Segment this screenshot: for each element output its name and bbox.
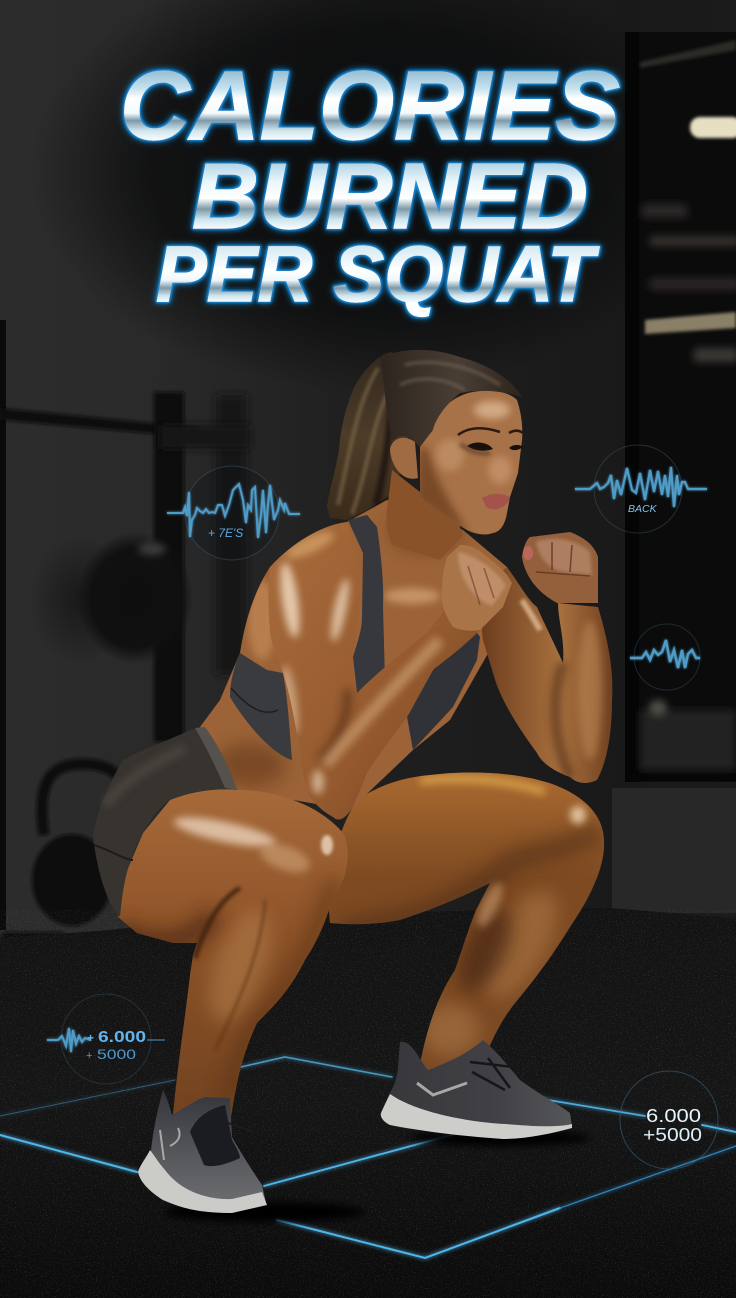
athlete xyxy=(93,350,612,1222)
head xyxy=(380,350,523,560)
neck xyxy=(386,470,463,560)
medicine ball xyxy=(30,532,193,666)
floor platform glowing lines xyxy=(0,1057,736,1258)
shorts xyxy=(93,727,237,917)
eyebrows xyxy=(458,428,523,435)
far shoe xyxy=(381,1040,572,1139)
HUD: waveform upper left xyxy=(167,466,300,560)
far arm xyxy=(482,567,612,783)
HUD: lower left readout xyxy=(47,994,165,1084)
value 6.000: 6.000 xyxy=(98,1029,146,1046)
sports bra straps and cup xyxy=(348,515,480,750)
title xyxy=(120,51,620,318)
near fist xyxy=(442,545,512,631)
floor shadows xyxy=(165,1130,590,1222)
squat rack and barbell xyxy=(0,320,250,930)
title line: calories: CALORIES xyxy=(120,51,620,160)
eyes xyxy=(467,442,523,451)
near shoe xyxy=(138,1090,267,1213)
HUD: lower right readout xyxy=(620,1071,718,1169)
HUD: waveform upper right with BACK label xyxy=(575,445,707,533)
value 5000: +5000 xyxy=(643,1125,702,1145)
ear xyxy=(390,438,418,479)
value 5000: 5000 xyxy=(97,1047,136,1062)
kettlebell xyxy=(0,764,122,964)
value 6.000: + xyxy=(87,1031,94,1045)
torso shading xyxy=(214,510,459,787)
torso xyxy=(200,500,507,810)
far leg xyxy=(329,772,604,1075)
ponytail xyxy=(327,352,415,520)
HUD: small waveform right xyxy=(630,624,700,690)
title line: burned: BURNED xyxy=(192,144,588,248)
face xyxy=(420,391,522,534)
value 5000: + xyxy=(86,1050,92,1062)
lips xyxy=(482,494,510,509)
title line: per squat: PER SQUAT xyxy=(156,229,600,318)
sports bra back band xyxy=(230,653,292,760)
rubber floor xyxy=(0,908,736,1298)
readout: + 7E'S xyxy=(208,526,243,540)
hair top xyxy=(380,350,522,447)
far fist xyxy=(522,532,598,603)
near leg xyxy=(118,789,348,1125)
near arm xyxy=(268,522,480,820)
BACK label: BACK xyxy=(628,503,658,515)
mirror window xyxy=(625,32,736,782)
value 6.000: 6.000 xyxy=(646,1106,701,1126)
